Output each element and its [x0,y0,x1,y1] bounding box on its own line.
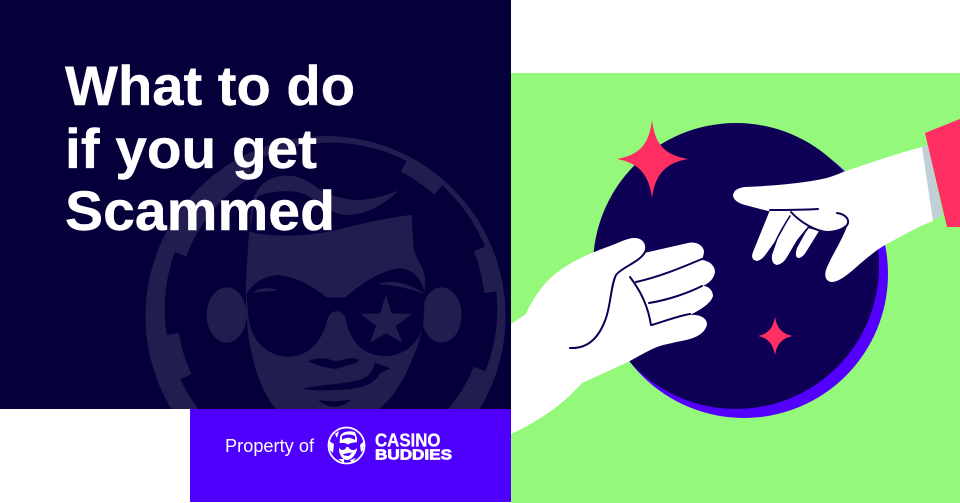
logo wordmark [375,430,452,464]
icon: small red sparkle [758,317,793,355]
text: property of: Property of [225,436,315,456]
panel: green illustration background [511,73,960,503]
finger one [752,210,794,261]
panel: navy title background [0,0,511,409]
watermark: chip inner cutout [177,155,485,409]
watermark: casino chip mascot [146,136,506,409]
title: Scammed [65,179,335,242]
logo text: buddies: BUDDIES [375,448,452,464]
hand body [733,147,933,282]
circle: navy disc [593,123,879,409]
watermark: chip notches [164,142,498,409]
circle: purple shadow [600,130,888,418]
hand palm crease lines [570,252,702,348]
finger three [796,228,819,258]
finger two [772,214,810,265]
sleeve cuff [922,145,943,221]
hand finger lines [770,209,848,246]
icon: large red sparkle [617,120,688,198]
logo text: casino: CASINO [375,430,440,450]
illustration: left open hand [511,238,715,434]
watermark: chip outer disc [146,136,506,409]
title: What to do [65,54,355,117]
watermark: mascot face [207,176,462,410]
title: if you get [65,117,317,180]
panel: property of bar [190,409,511,502]
icon: casino buddies logo chip [328,428,364,464]
red sleeve [925,119,960,227]
title [65,54,355,242]
illustration: right pointing hand [733,119,960,282]
